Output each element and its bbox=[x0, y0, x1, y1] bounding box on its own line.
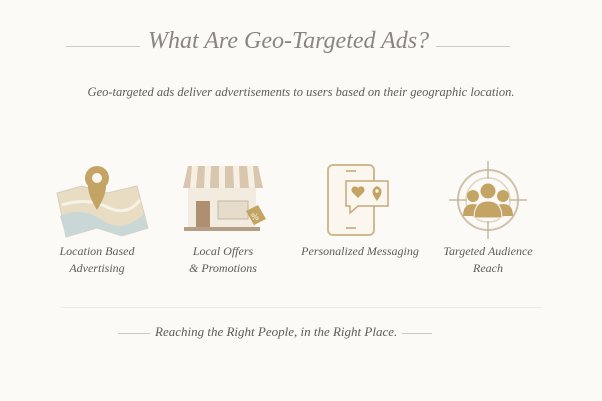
label: location bbox=[59, 244, 134, 275]
label: audience bbox=[443, 244, 533, 275]
label: audience: Targeted Audience bbox=[443, 244, 533, 258]
label: offers: & Promotions bbox=[189, 261, 257, 275]
title: What Are Geo-Targeted Ads? bbox=[148, 28, 429, 54]
label: offers: Local Offers bbox=[193, 244, 253, 258]
label: offers bbox=[189, 244, 257, 275]
icon: store bbox=[183, 166, 266, 231]
footer tagline: Reaching the Right People, in the Right Place. bbox=[155, 324, 397, 339]
icon: phone with messaging bbox=[327, 164, 389, 236]
icon: store: % bbox=[251, 212, 259, 222]
label: location: Location Based bbox=[60, 244, 134, 258]
label: location: Advertising bbox=[69, 261, 125, 275]
icon: map with pin bbox=[56, 166, 148, 238]
icon: target audience bbox=[449, 161, 527, 239]
label: messaging: Personalized Messaging bbox=[301, 244, 419, 258]
subtitle: Geo-targeted ads deliver advertisements to users based on their geographic location. bbox=[88, 85, 514, 99]
label: audience: Reach bbox=[473, 261, 503, 275]
